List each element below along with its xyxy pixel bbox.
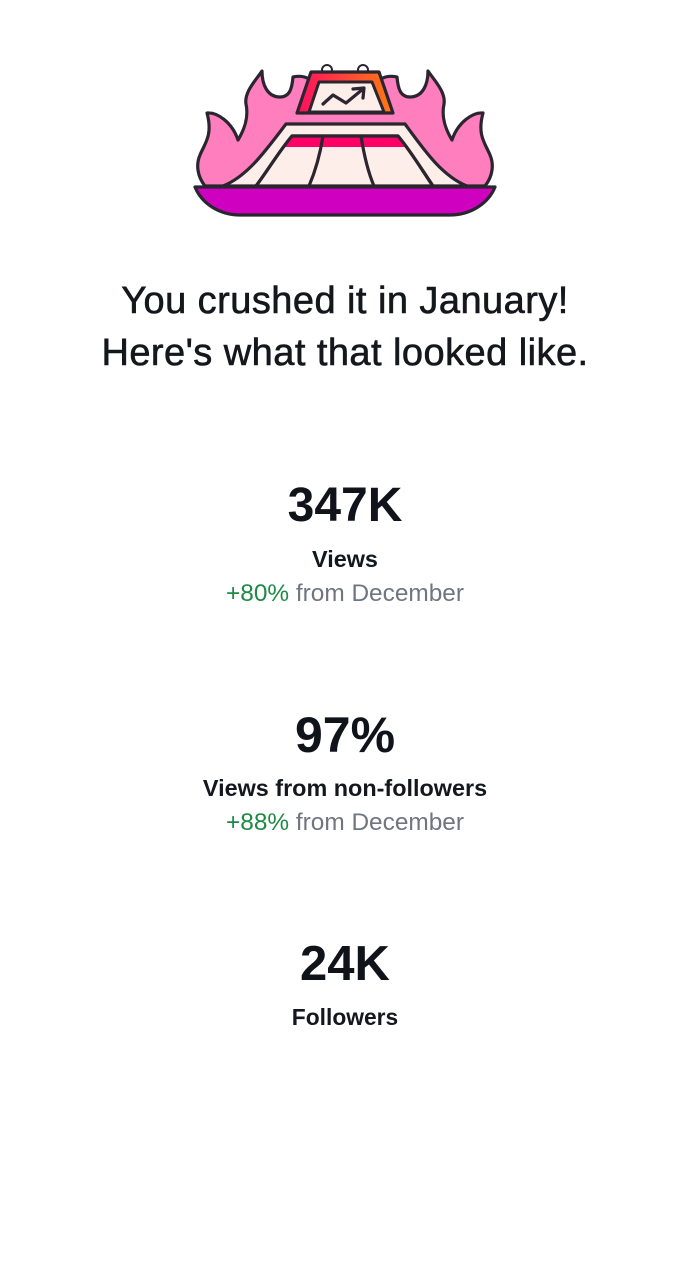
stat: followers xyxy=(292,937,398,1030)
title xyxy=(101,280,589,374)
icon: flames xyxy=(198,71,492,186)
stat: views from non-followers: Views from non-followers xyxy=(203,775,487,801)
icon: tray xyxy=(195,187,495,215)
stat: views: +80% from December xyxy=(226,580,464,607)
stat: followers: 24K xyxy=(300,937,390,991)
icon: calendar xyxy=(297,65,393,113)
stat: views xyxy=(226,479,464,607)
stat: views: Views xyxy=(312,546,378,572)
stat: views from non-followers: +88% from December xyxy=(226,809,464,836)
stat: views from non-followers: 97% xyxy=(295,707,395,763)
title: Here's what that looked like. xyxy=(101,332,589,374)
stat: views from non-followers xyxy=(203,707,487,836)
title: You crushed it in January! xyxy=(121,280,569,322)
illustration: burning road and calendar on tray xyxy=(193,64,497,217)
stat: followers: Followers xyxy=(292,1004,398,1030)
icon: road xyxy=(223,124,467,186)
stat: views: 347K xyxy=(288,479,402,532)
